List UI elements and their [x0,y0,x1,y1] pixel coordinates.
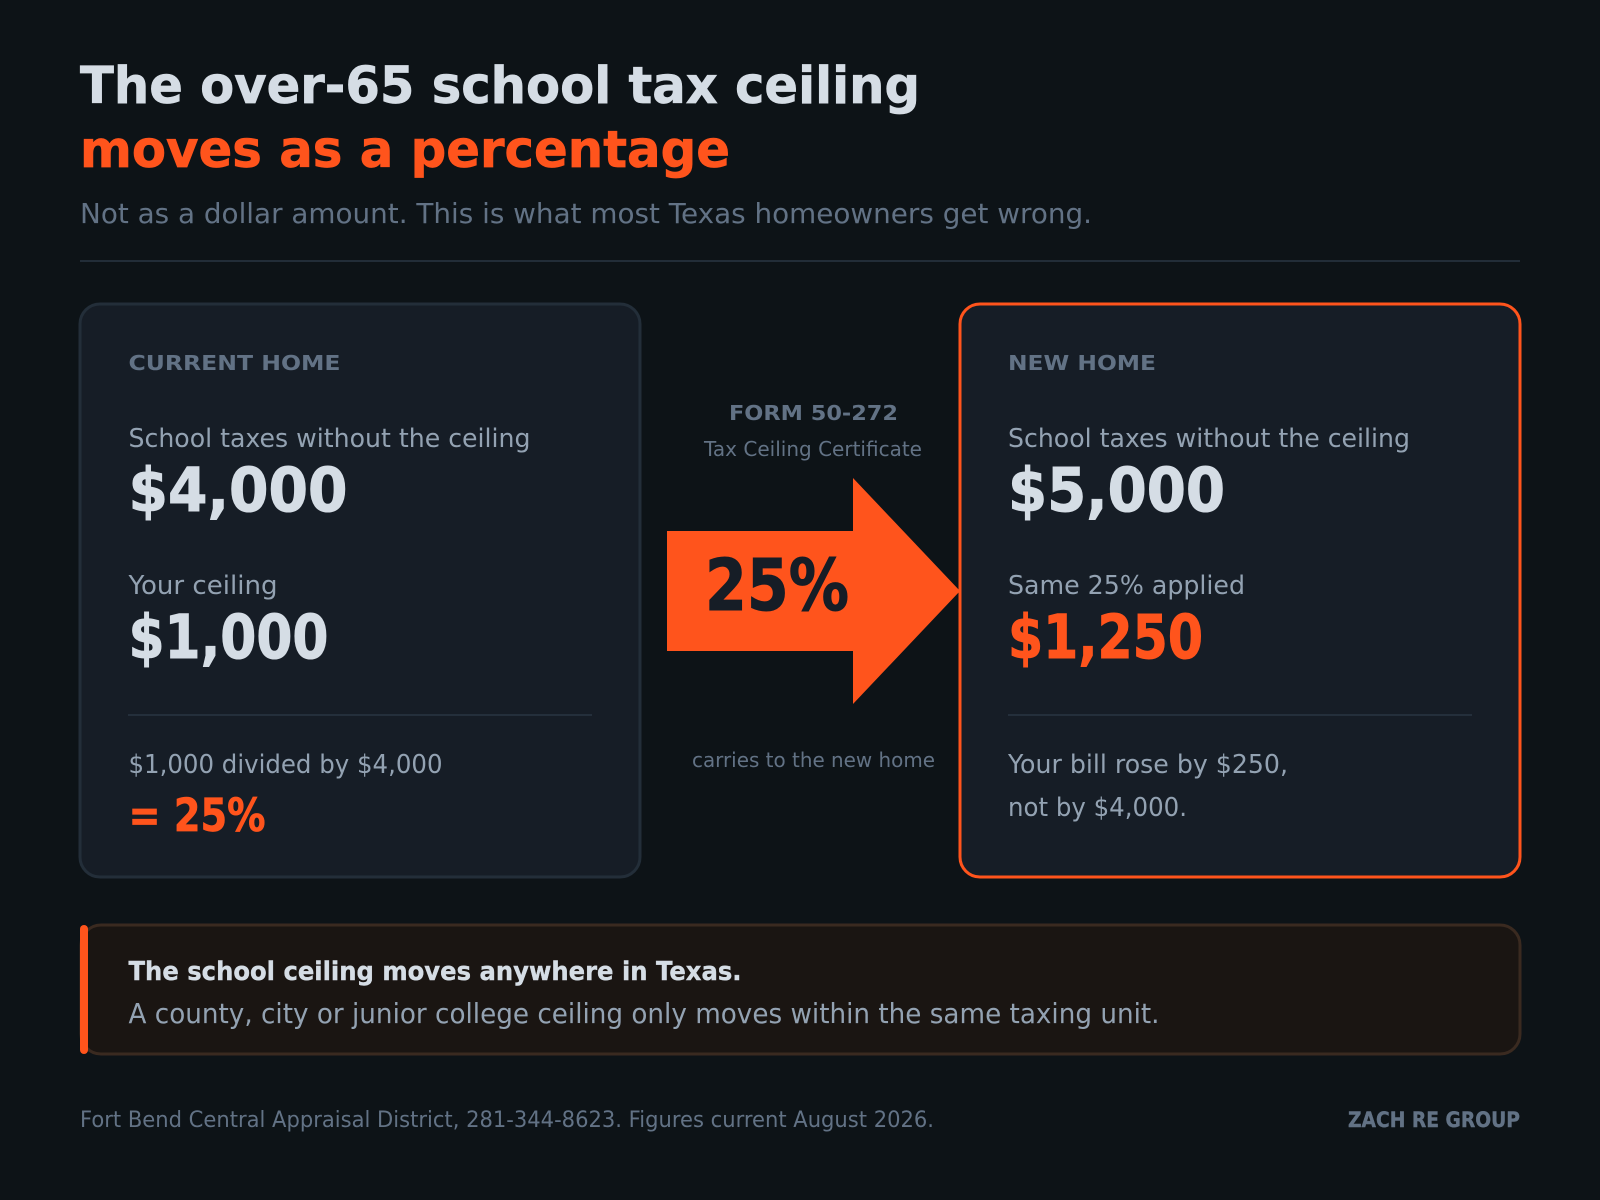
subtitle: Not as a dollar amount. This is what most Texas homeowners get wrong. [80,197,1092,230]
calculation: = 25% [128,789,266,842]
your ceiling: Your ceiling [127,571,278,601]
bill summary: not by $4,000. [1008,793,1187,823]
panel: new home [960,304,1520,877]
same percent applied: $1,250 [1008,602,1203,673]
school taxes without ceiling: $4,000 [128,455,348,526]
arrow caption: carries to the new home [692,748,935,772]
calculation [128,750,442,842]
current home label: CURRENT HOME [128,351,340,375]
title: moves as a percentage [80,121,730,180]
form label: Tax Ceiling Certificate [703,437,922,461]
bill summary [1007,750,1288,823]
school taxes without ceiling: $5,000 [1008,455,1225,526]
callout body: A county, city or junior college ceiling only moves within the same taxing unit. [128,997,1160,1030]
same percent applied [1008,571,1245,673]
your ceiling: $1,000 [128,602,328,673]
panel: current home [80,304,640,877]
title [80,57,920,180]
calculation: $1,000 divided by $4,000 [128,750,442,780]
arrow with 25%: 25% [705,544,849,627]
school taxes without ceiling: School taxes without the ceiling [128,424,530,454]
form label [703,401,922,461]
callout heading: The school ceiling moves anywhere in Texas. [128,957,742,987]
new home label: NEW HOME [1008,351,1156,375]
footer brand: ZACH RE GROUP [1348,1108,1520,1132]
arrow with 25% [667,478,960,704]
school taxes without ceiling [128,424,530,526]
form label: FORM 50-272 [729,401,898,425]
callout [80,925,1520,1054]
title: The over-65 school tax ceiling [80,57,920,116]
same percent applied: Same 25% applied [1008,571,1245,601]
school taxes without ceiling [1008,424,1410,526]
your ceiling [127,571,328,673]
footer source: Fort Bend Central Appraisal District, 281-344-8623. Figures current August 2026. [80,1108,934,1133]
school taxes without ceiling: School taxes without the ceiling [1008,424,1410,454]
bill summary: Your bill rose by $250, [1007,750,1288,780]
